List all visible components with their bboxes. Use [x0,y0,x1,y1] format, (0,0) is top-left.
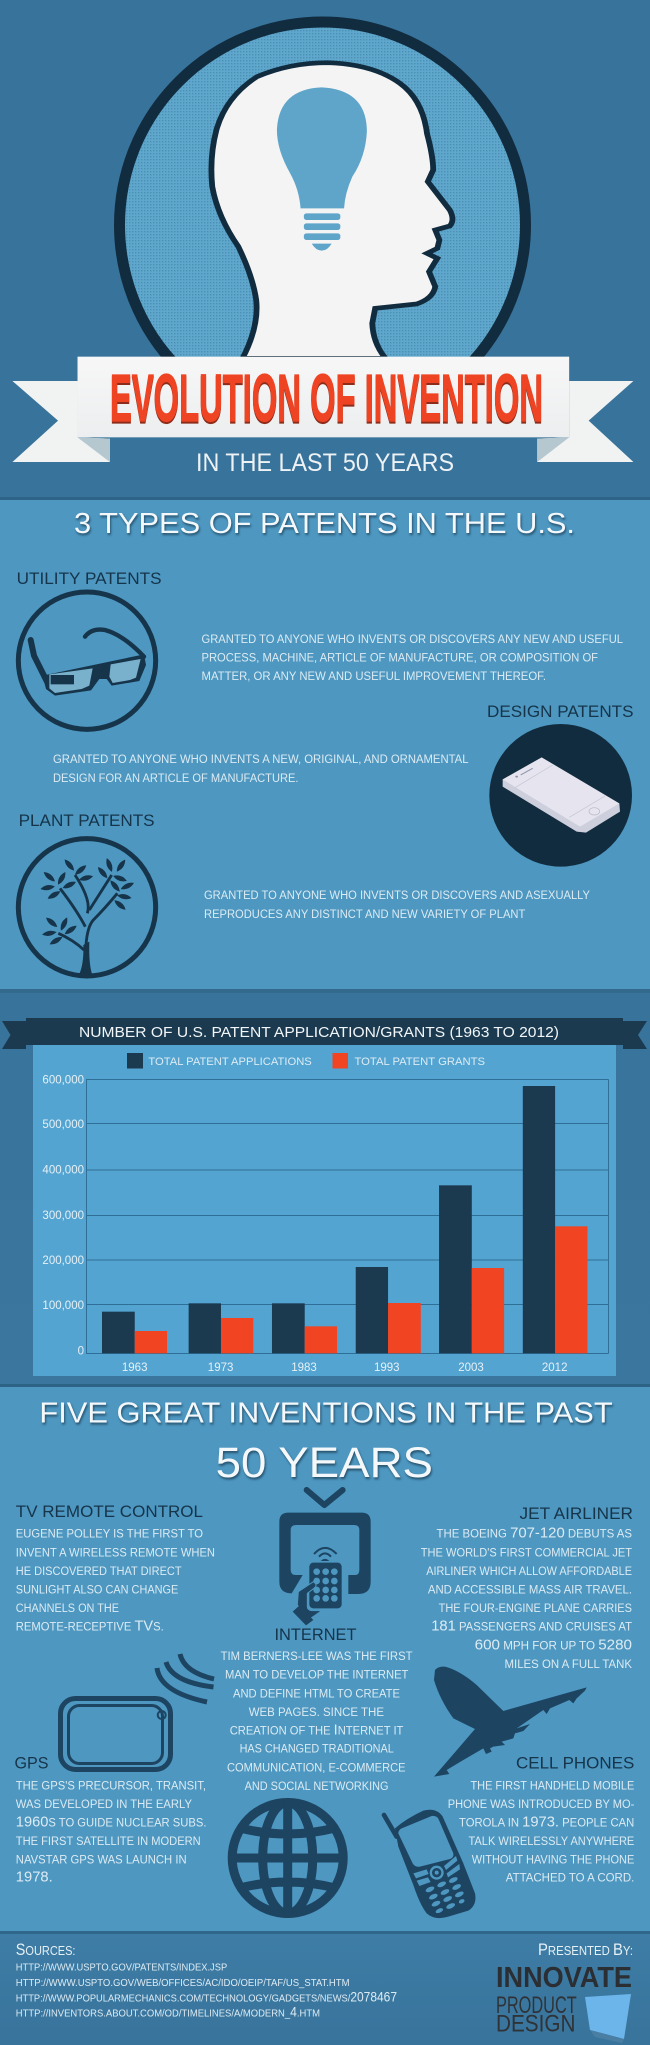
logo: innovate product design: INNOVATE [496,1962,632,1994]
sources heading: SOURCES: [16,1940,76,1959]
icon: mobile phone [384,1810,475,1918]
design patents heading: DESIGN PATENTS [487,703,634,721]
gps text: 1978. [16,1869,53,1886]
internet text: MAN TO DEVELOP THE INTERNET [225,1670,408,1682]
tv remote text: CHANNELS ON THE [16,1603,119,1615]
utility patents text: GRANTED TO ANYONE WHO INVENTS OR DISCOVERS ANY NEW AND USEFUL [202,634,624,646]
x axis labels: 2003 [458,1362,484,1374]
design patents text [53,754,469,785]
utility patents text: MATTER, OR ANY NEW AND USEFUL IMPROVEMENT THEREOF. [202,671,546,683]
icon: light bulb [277,87,367,251]
y axis labels: 400,000 [42,1164,84,1176]
panel: 3 types of patents [0,500,650,993]
internet text: CREATION OF THE INTERNET IT [230,1721,403,1738]
x axis labels: 1993 [374,1362,400,1374]
x axis labels: 1963 [122,1362,147,1374]
y axis labels: 300,000 [42,1210,84,1222]
panel: five great inventions [0,1387,650,1934]
bar chart [42,1074,608,1374]
subtitle: IN THE LAST 50 YEARS [196,449,454,477]
jet airliner text: 600 MPH FOR UP TO 5280 [475,1636,632,1653]
legend [127,1053,485,1068]
chart background [33,1045,616,1376]
sources list [16,1962,397,2020]
cell phones text: ATTACHED TO A CORD. [506,1873,634,1885]
chart title: NUMBER OF U.S. PATENT APPLICATION/GRANTS (1963 TO 2012) [79,1024,559,1041]
cell phones text: PHONE WAS INTRODUCED BY MO- [448,1799,634,1811]
cell phones text [448,1780,635,1885]
jet airliner text: 181 PASSENGERS AND CRUISES AT [431,1618,632,1635]
logo: innovate product design: PRODUCT [496,1992,577,2019]
jet airliner text: AIRLINER WHICH ALLOW AFFORDABLE [426,1566,632,1578]
sources list: HTTP://WWW.USPTO.GOV/WEB/OFFICES/AC/IDO/OEIP/TAF/US_STAT.HTM [16,1977,350,1989]
x axis labels: 1983 [291,1362,317,1374]
tv remote text: SUNLIGHT ALSO CAN CHANGE [16,1584,179,1596]
legend: TOTAL PATENT APPLICATIONS [148,1056,312,1068]
x axis labels: 2012 [542,1362,567,1374]
icon: airplane [434,1667,587,1777]
jet airliner text: AND ACCESSIBLE MASS AIR TRAVEL. [428,1584,632,1596]
legend: TOTAL PATENT GRANTS [354,1056,485,1068]
gps text [16,1780,206,1886]
sources list: HTTP://INVENTORS.ABOUT.COM/OD/TIMELINES/A/MODERN_4.HTM [16,2005,320,2020]
internet text: WEB PAGES. SINCE THE [249,1707,384,1719]
heading: 3 TYPES OF PATENTS IN THE U.S. [74,508,575,540]
jet airliner text: THE BOEING 707-120 DEBUTS AS [436,1525,632,1542]
icon: smartphone [489,724,632,867]
jet airliner text: THE WORLD'S FIRST COMMERCIAL JET [421,1547,632,1559]
plant patents text [204,890,590,921]
jet airliner text: THE FOUR-ENGINE PLANE CARRIES [439,1603,632,1615]
jet airliner heading: JET AIRLINER [520,1505,633,1523]
internet text [221,1651,412,1793]
internet text: AND SOCIAL NETWORKING [245,1781,389,1793]
y axis labels: 500,000 [42,1119,84,1131]
jet airliner text [421,1525,632,1671]
plant patents text: REPRODUCES ANY DISTINCT AND NEW VARIETY OF PLANT [204,909,525,921]
gps heading: GPS [14,1754,48,1772]
y axis labels [42,1074,84,1358]
presented by: PRESENTED BY: [538,1940,633,1959]
x axis labels: 1973 [208,1362,233,1374]
icon: tree [18,839,156,976]
chart title ribbon [2,1018,647,1049]
sources list: HTTP://WWW.USPTO.GOV/PATENTS/INDEX.JSP [16,1962,227,1974]
utility patents text: PROCESS, MACHINE, ARTICLE OF MANUFACTURE, OR COMPOSITION OF [202,652,598,664]
internet text: HAS CHANGED TRADITIONAL [240,1744,394,1756]
heading line one: FIVE GREAT INVENTIONS IN THE PAST [39,1398,613,1430]
internet text: AND DEFINE HTML TO CREATE [233,1688,400,1700]
cell phones text: TOROLA IN 1973. PEOPLE CAN [459,1813,634,1830]
tv remote text: INVENT A WIRELESS REMOTE WHEN [16,1547,215,1559]
icon: circular medallion [120,22,526,428]
gps text: WAS DEVELOPED IN THE EARLY [16,1799,192,1811]
tv remote heading: TV REMOTE CONTROL [16,1503,203,1521]
cell phones text: WITHOUT HAVING THE PHONE [472,1854,635,1866]
tv remote text: HE DISCOVERED THAT DIRECT [16,1566,182,1578]
heading line two: 50 YEARS [216,1439,433,1487]
utility patents heading: UTILITY PATENTS [17,570,162,588]
jet airliner text: MILES ON A FULL TANK [504,1659,632,1671]
logo: innovate product design [496,1962,632,2043]
internet heading: INTERNET [274,1626,356,1644]
title ribbon [12,357,633,462]
design patents text: GRANTED TO ANYONE WHO INVENTS A NEW, ORIGINAL, AND ORNAMENTAL [53,754,469,766]
internet text: TIM BERNERS-LEE WAS THE FIRST [221,1651,412,1663]
y axis labels: 0 [78,1346,84,1358]
tv remote text: REMOTE-RECEPTIVE TVS. [16,1618,164,1635]
utility patents text [202,634,624,683]
internet text: COMMUNICATION, E-COMMERCE [227,1763,406,1775]
sources list: HTTP://WWW.POPULARMECHANICS.COM/TECHNOLOGY/GADGETS/NEWS/2078467 [16,1989,397,2004]
x axis labels [122,1362,567,1374]
icon: tv and remote [279,1490,371,1625]
cell phones heading: CELL PHONES [516,1754,634,1772]
gps text: NAVSTAR GPS WAS LAUNCH IN [16,1854,187,1866]
gps text: THE FIRST SATELLITE IN MODERN [16,1836,201,1848]
tv remote text: EUGENE POLLEY IS THE FIRST TO [16,1529,203,1541]
cell phones text: TALK WIRELESSLY ANYWHERE [468,1836,635,1848]
panel: footer [0,1934,650,2045]
cell phones text: THE FIRST HANDHELD MOBILE [470,1780,635,1792]
gps text: THE GPS'S PRECURSOR, TRANSIT, [16,1780,206,1792]
icon: gps device [60,1654,214,1770]
panel: header [0,0,650,500]
icon: globe [232,1802,343,1914]
y axis labels: 200,000 [42,1255,84,1267]
gps text: 1960S TO GUIDE NUCLEAR SUBS. [16,1813,206,1830]
icon: head silhouette [211,63,452,358]
plant patents heading: PLANT PATENTS [19,812,155,830]
panel: patent chart [0,993,650,1387]
icon: smart glasses [18,592,156,729]
tv remote text [16,1529,215,1635]
y axis labels: 100,000 [42,1300,84,1312]
plant patents text: GRANTED TO ANYONE WHO INVENTS OR DISCOVERS AND ASEXUALLY [204,890,590,902]
logo: innovate product design: DESIGN [496,2010,576,2038]
design patents text: DESIGN FOR AN ARTICLE OF MANUFACTURE. [53,773,298,785]
y axis labels: 600,000 [42,1074,84,1086]
